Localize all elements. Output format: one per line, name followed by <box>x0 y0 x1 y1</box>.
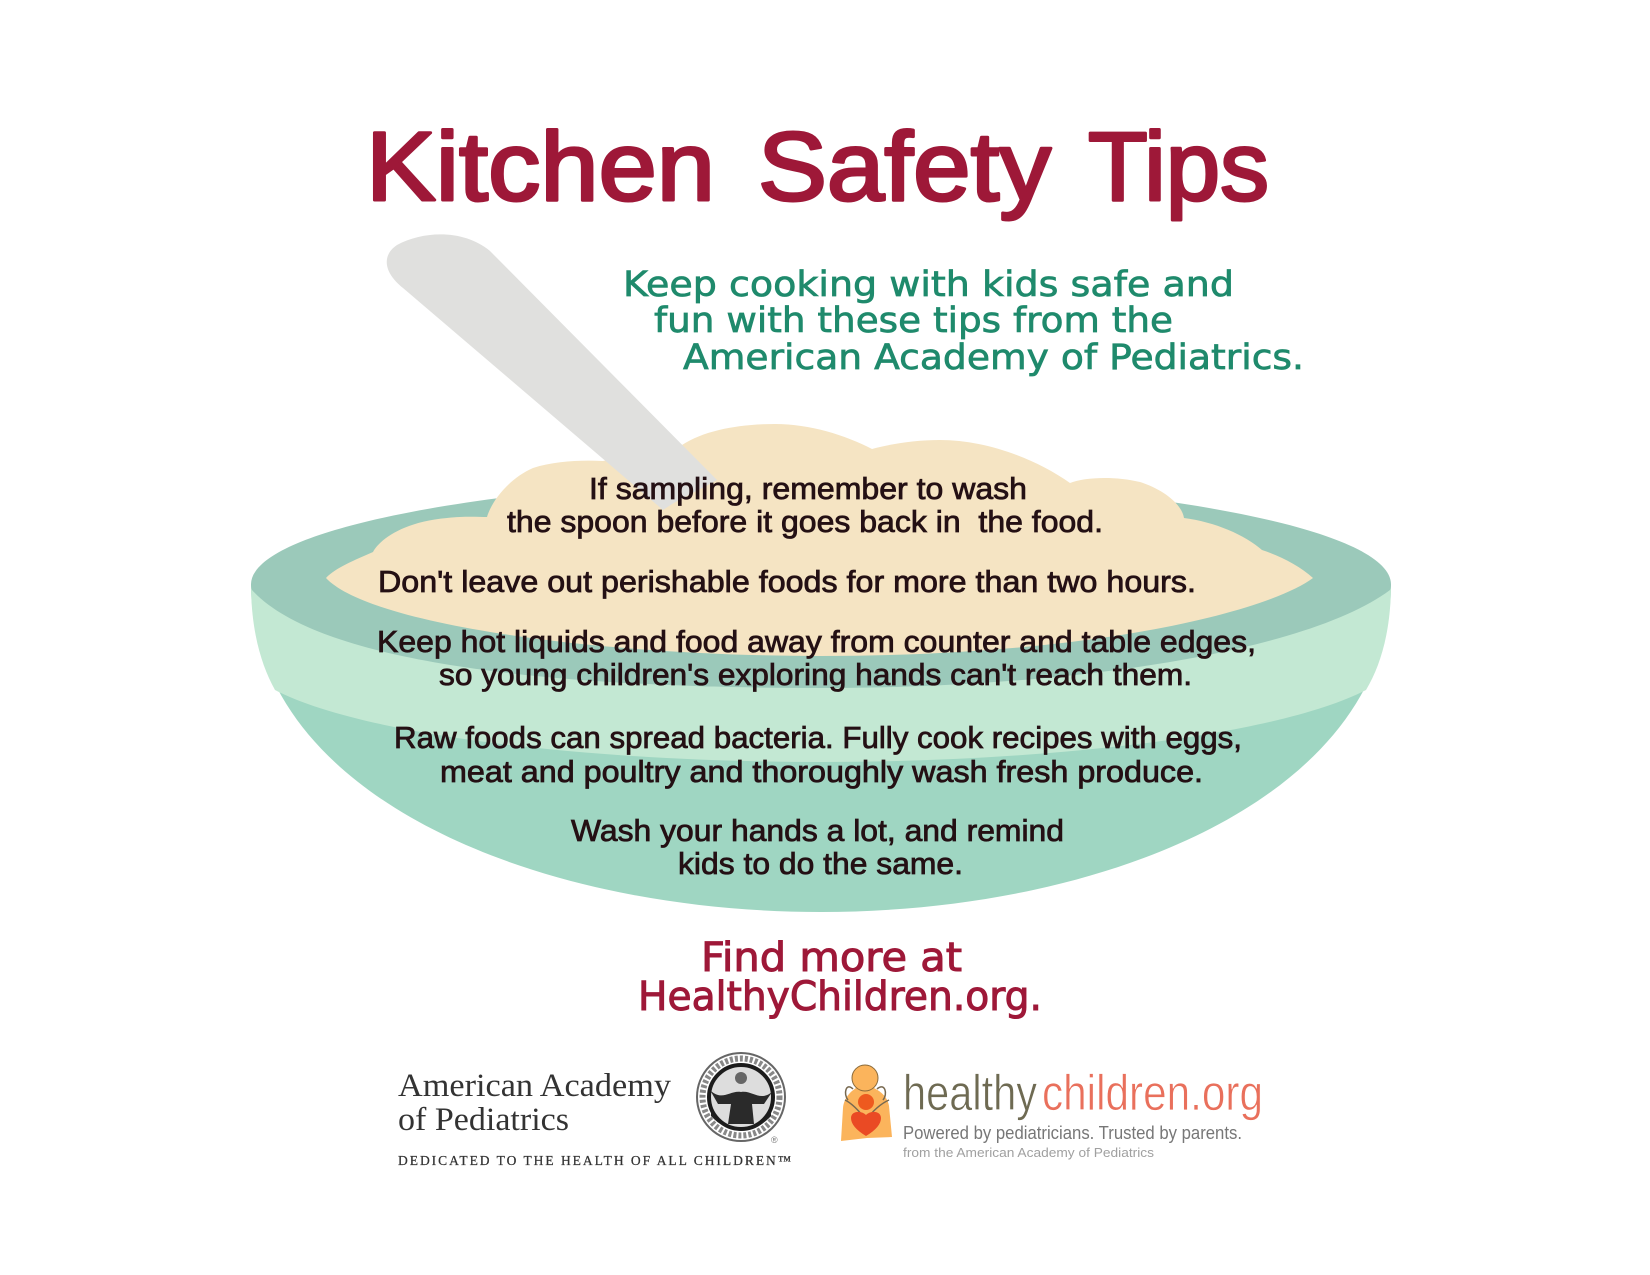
healthychildren.org logo: Powered by pediatricians. Trusted by parents. <box>903 1123 1242 1143</box>
title <box>366 112 1269 221</box>
find more call to action <box>638 935 1042 1020</box>
subtitle: Keep cooking with kids safe and <box>623 265 1234 305</box>
tip: hot liquids <box>377 624 1256 692</box>
subtitle <box>623 265 1304 378</box>
healthychildren.org logo: children.org <box>1042 1065 1263 1121</box>
find more call to action: HealthyChildren.org. <box>638 974 1042 1020</box>
American Academy of Pediatrics logo: DEDICATED TO THE HEALTH OF ALL CHILDREN™ <box>398 1153 791 1168</box>
title: Kitchen <box>366 112 715 221</box>
tip: hot liquids: so young children's exploring hands can't reach them. <box>439 657 1192 692</box>
bowl rim <box>251 478 1391 688</box>
tip: wash the spoon: If sampling, remember to wash <box>589 471 1027 506</box>
icon: AAP seal: ® <box>771 1135 778 1145</box>
American Academy of Pediatrics logo: American Academy <box>398 1068 672 1104</box>
bowl illustration <box>251 234 1391 912</box>
tip: perishable foods: Don't leave out perishable foods for more than two hours. <box>378 564 1196 599</box>
American Academy of Pediatrics logo: of Pediatrics <box>398 1102 569 1138</box>
tip: raw foods <box>394 720 1242 789</box>
healthychildren.org logo: healthy <box>903 1065 1037 1121</box>
bowl light band <box>251 584 1391 762</box>
icon: AAP seal <box>697 1053 785 1145</box>
tip: wash the spoon <box>507 471 1103 539</box>
subtitle: fun with these tips from the <box>654 301 1173 341</box>
title: Tips <box>1088 112 1269 221</box>
title: Safety <box>758 112 1052 221</box>
find more call to action: Find more at <box>701 935 962 981</box>
tip: wash hands: Wash your hands a lot, and remind <box>571 813 1064 848</box>
American Academy of Pediatrics logo <box>398 1053 791 1168</box>
tip: raw foods: meat and poultry and thoroughly wash fresh produce. <box>440 754 1203 789</box>
tip: wash the spoon: the spoon before it goes back in the food. <box>507 504 1103 539</box>
spoon <box>387 234 717 510</box>
food mound <box>326 424 1313 656</box>
healthychildren.org logo <box>841 1065 1263 1160</box>
tip: wash hands <box>571 813 1064 881</box>
healthychildren.org logo: from the American Academy of Pediatrics <box>903 1145 1155 1160</box>
subtitle: American Academy of Pediatrics. <box>683 338 1304 378</box>
tip: raw foods: Raw foods can spread bacteria. Fully cook recipes with eggs, <box>394 720 1242 755</box>
icon: parent and child <box>841 1065 892 1141</box>
tip: hot liquids: Keep hot liquids and food away from counter and table edges, <box>377 624 1256 659</box>
tip: wash hands: kids to do the same. <box>678 846 963 881</box>
bowl lower body <box>251 584 1391 912</box>
